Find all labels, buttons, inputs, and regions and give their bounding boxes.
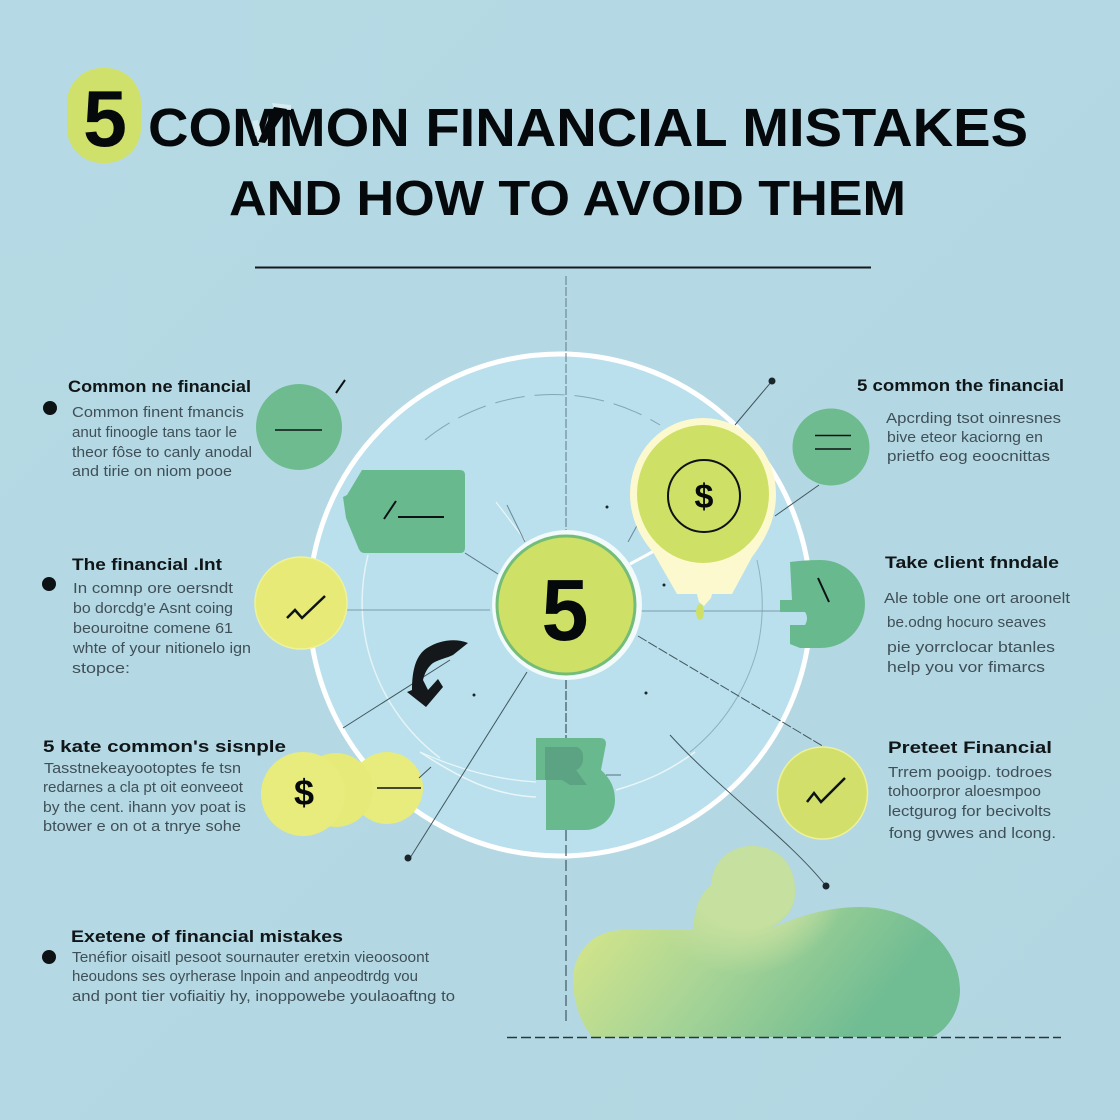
body text: tohoorpror aloesmpoo bbox=[888, 784, 1041, 800]
badge: number 5 bbox=[67, 68, 141, 163]
body text: pie yorrclocar btanles bbox=[887, 640, 1055, 656]
body text: Tasstnekeayootoptes fe tsn bbox=[44, 761, 241, 777]
title check glitch bbox=[252, 103, 291, 143]
heading line 2: AND HOW TO AVOID THEM bbox=[229, 172, 906, 226]
body text: beouroitne comene 61 bbox=[73, 621, 233, 637]
icon: lime circle with trend line bbox=[778, 747, 868, 839]
panel: tip 3 bbox=[778, 738, 1056, 842]
icon: curved arrow bbox=[407, 640, 468, 707]
body text: fong gvwes and lcong. bbox=[889, 826, 1056, 842]
title bbox=[67, 68, 1028, 226]
icon: dollar pin: $ bbox=[695, 478, 714, 516]
body text: In comnp ore oersndt bbox=[73, 581, 233, 597]
heading: The financial .Int bbox=[72, 555, 222, 574]
heading: Exetene of financial mistakes bbox=[71, 927, 343, 946]
body text: Common finent fmancis bbox=[72, 405, 244, 421]
body text: Tenéfior oisaitl pesoot sournauter eretxin vieoosoont bbox=[72, 950, 429, 966]
body text: bo dorcdg'e Asnt coing bbox=[73, 601, 233, 617]
baseline dashes bbox=[507, 1036, 1061, 1038]
heading: Common ne financial bbox=[68, 377, 251, 396]
heading: 5 kate common's sisnple bbox=[43, 737, 286, 756]
body text bbox=[43, 761, 246, 835]
body text bbox=[72, 581, 251, 677]
icon: green circle with equals bbox=[792, 408, 870, 486]
small dots bbox=[404, 378, 830, 890]
body text: whte of your nitionelo ign bbox=[72, 641, 251, 657]
body text: and tirie on niom pooe bbox=[72, 464, 232, 480]
heading line 1: COMMON FINANCIAL MISTAKES bbox=[148, 98, 1028, 158]
badge: number 5: 5 bbox=[83, 74, 127, 163]
body text: Trrem pooigp. todroes bbox=[888, 765, 1052, 781]
body text bbox=[886, 411, 1061, 465]
heading: Preteet Financial bbox=[888, 738, 1052, 757]
body text bbox=[72, 405, 252, 480]
body text: heoudons ses oyrherase lnpoin and anpeodtrdg vou bbox=[72, 969, 418, 985]
icon: overlapping coins: $ bbox=[294, 772, 314, 813]
heading: Take client fnndale bbox=[885, 553, 1059, 572]
icon: green circle with line bbox=[256, 380, 345, 470]
bullet bbox=[43, 401, 57, 415]
wheel inner rings and spokes bbox=[312, 276, 826, 1025]
body text: and pont tier vofiaitiy hy, inoppowebe youlaoaftng to bbox=[72, 989, 455, 1005]
illustration: gradient blob bbox=[573, 846, 960, 1037]
body text: prietfo eog eoocnittas bbox=[887, 449, 1050, 465]
panel: mistake 4 bbox=[42, 927, 455, 1005]
icon: green tag bbox=[343, 470, 465, 553]
panel: mistake 3 bbox=[43, 737, 431, 836]
panel: mistake 1 bbox=[43, 377, 345, 480]
bullet bbox=[42, 950, 56, 964]
icon: green split circle bbox=[780, 560, 865, 648]
panel: tip 1 bbox=[792, 376, 1064, 486]
body text: stopce: bbox=[72, 661, 130, 677]
icon: yellow circle with trend line bbox=[255, 557, 347, 649]
body text: redarnes a cla pt oit eonveeot bbox=[43, 780, 243, 796]
body text: by the cent. ihann yov poat is bbox=[43, 800, 246, 816]
chart: central wheel bbox=[309, 276, 830, 1025]
icon: green block letter bbox=[536, 738, 621, 830]
panel: tip 2 bbox=[884, 553, 1070, 676]
body text bbox=[888, 765, 1056, 842]
icon: centre number badge: 5 bbox=[542, 562, 588, 659]
heading: 5 common the financial bbox=[857, 376, 1064, 395]
title rule bbox=[255, 266, 871, 268]
panel: mistake 2 bbox=[42, 555, 347, 677]
wheel disc bbox=[309, 354, 811, 856]
icon: overlapping coins bbox=[261, 752, 431, 836]
body text bbox=[72, 950, 455, 1005]
icon: dollar pin bbox=[630, 418, 776, 620]
bullet bbox=[42, 577, 56, 591]
body text: help you vor fimarcs bbox=[887, 660, 1045, 676]
body text: be.odng hocuro seaves bbox=[887, 615, 1046, 631]
body text: lectgurog for becivolts bbox=[888, 804, 1051, 820]
body text: theor fôse to canly anodal bbox=[72, 445, 252, 461]
body text: anut finoogle tans taor le bbox=[72, 425, 237, 441]
body text: Apcrding tsot oinresnes bbox=[886, 411, 1061, 427]
icon: centre number badge bbox=[492, 530, 642, 680]
body text bbox=[884, 591, 1070, 676]
body text: bive eteor kaciorng en bbox=[887, 430, 1043, 446]
body text: btower e on ot a tnrye sohe bbox=[43, 819, 241, 835]
body text: Ale toble one ort aroonelt bbox=[884, 591, 1070, 607]
